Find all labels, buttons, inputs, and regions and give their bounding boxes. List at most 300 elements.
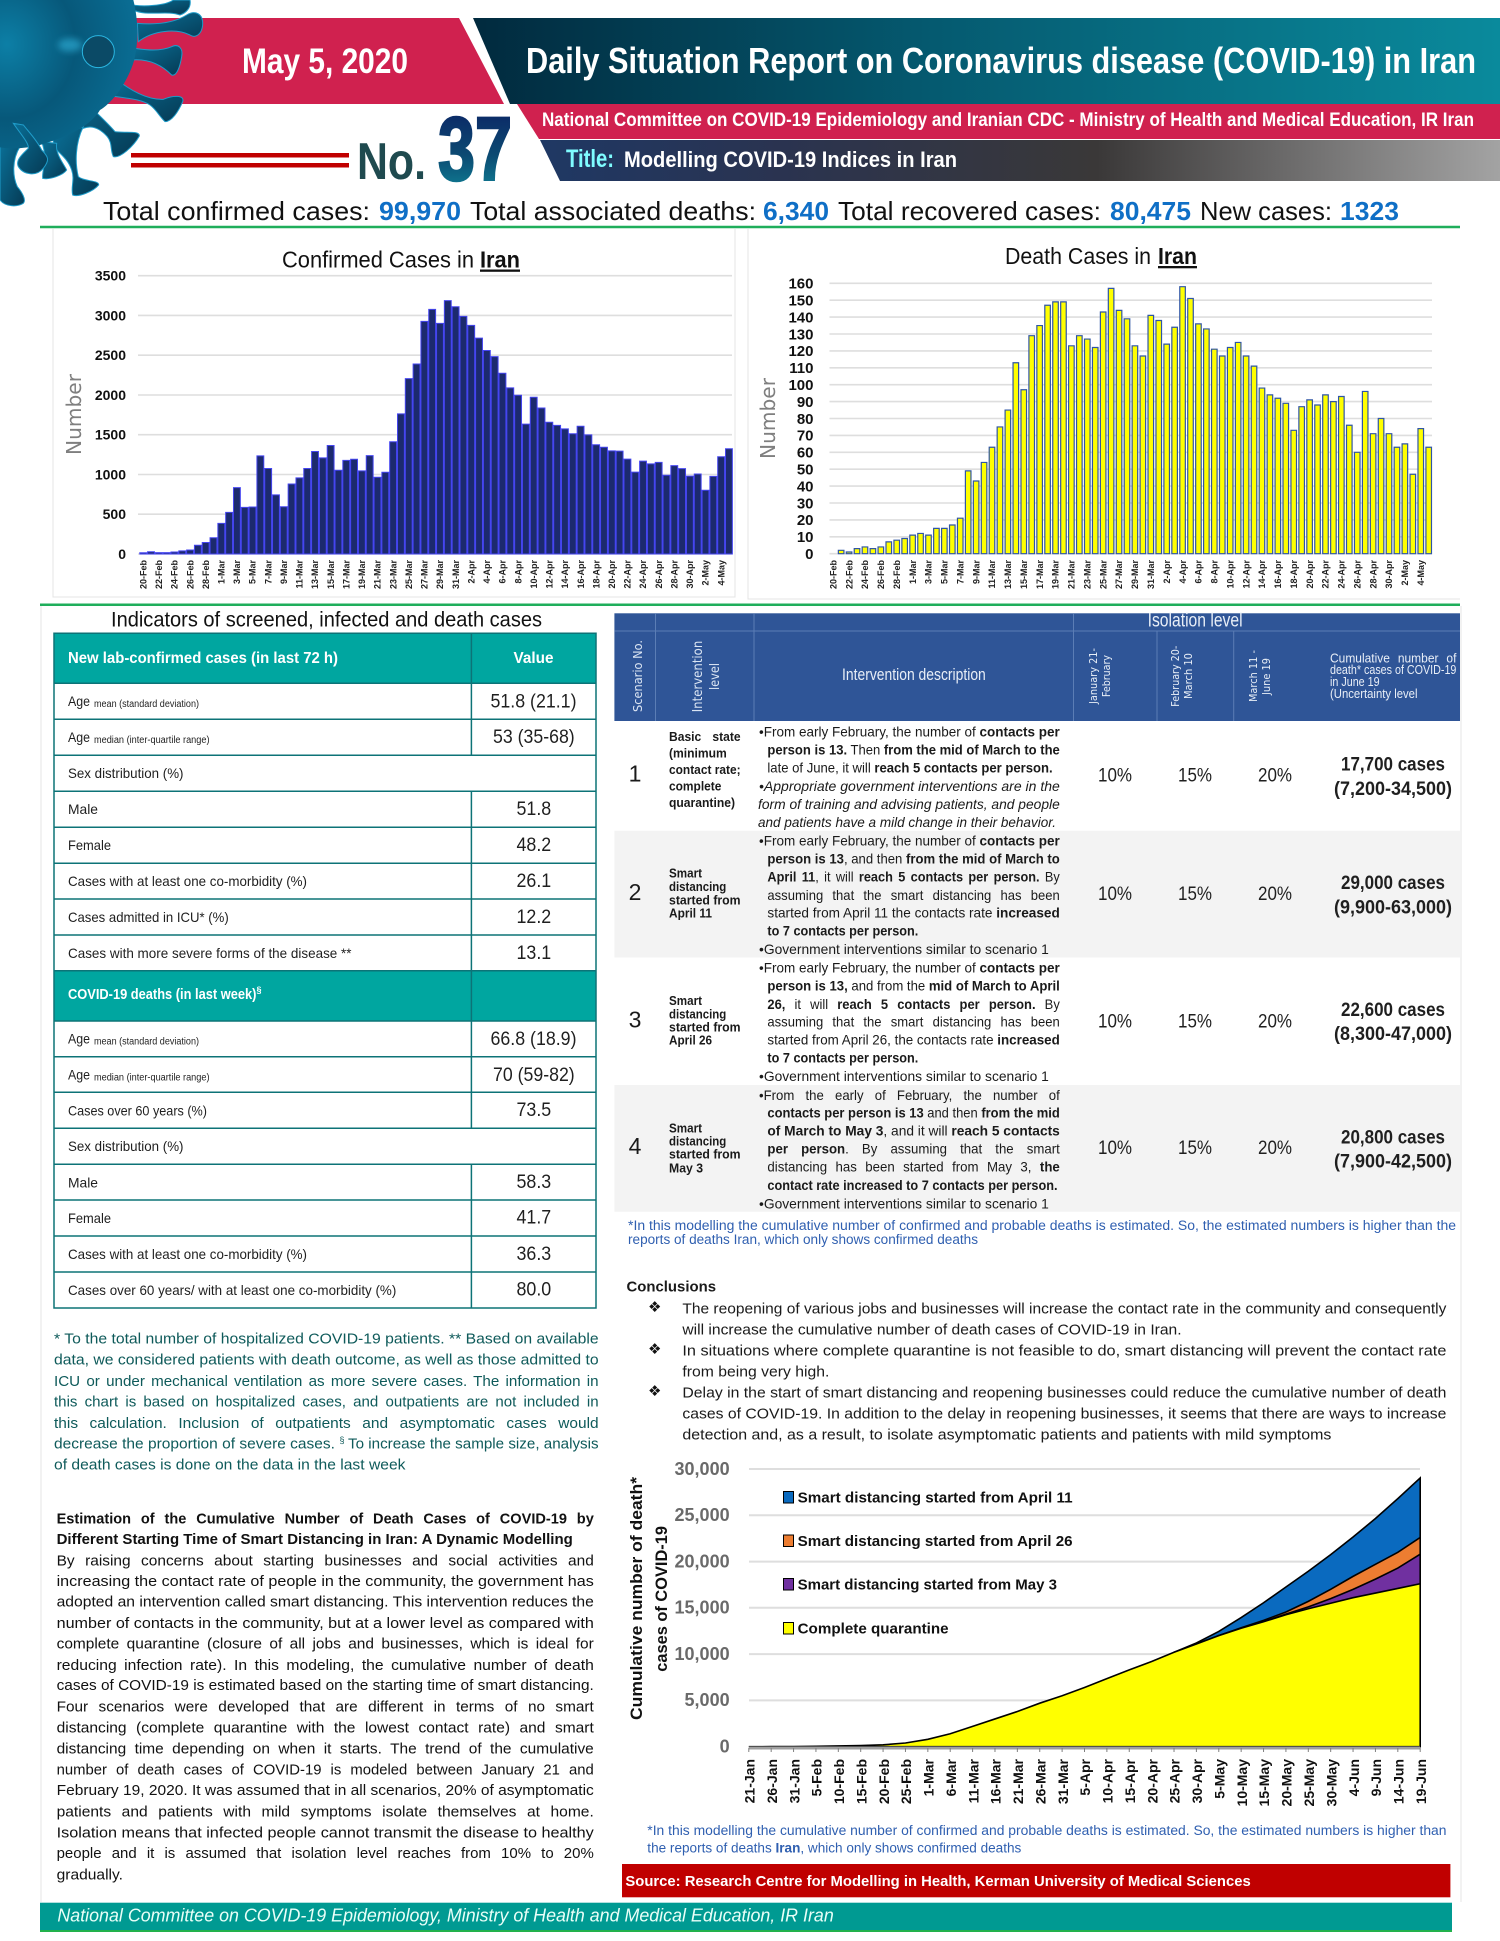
icon: coronavirus [0,0,203,206]
scenario 1: and patients have a mild change in their behavior. [758,814,1056,830]
row: male [68,799,551,820]
headline totals: Total associated deaths: [470,196,756,226]
scenario 4: started from [669,1148,741,1162]
row: co-morbidity: Cases with at least one co-morbidity (%) [68,873,307,889]
table header: Cumulative number of [1330,650,1457,665]
conclusion 3 [648,1382,1446,1443]
row: over 60 with co-morbidity [68,1280,551,1300]
issue number [131,100,512,200]
conclusion 3: cases of COVID-19. In addition to the delay in reopening businesses, it seems that there are ways to increase [682,1405,1446,1422]
chart: confirmed cases [62,246,732,589]
row: deaths sex distribution: Sex distribution (%) [68,1138,184,1154]
study body: number of contacts in the community, but at a lower level as compared with [57,1615,594,1632]
x axis date labels: 11-Mar [987,560,997,589]
scenario 3: started from April 26, the contacts rate increased [767,1032,1060,1048]
row: more severe: Cases with more severe forms of the disease ** [68,945,352,961]
x axis date labels: 15-Mar [326,560,336,589]
x axis date labels: 21-Mar [1067,560,1077,589]
x axis date labels: 16-Apr [1273,560,1283,589]
scenario 2: 10% [1098,884,1132,905]
header: COVID-19 deaths: § [256,985,262,995]
row: deaths age median [68,1065,575,1086]
area: smart distancing from May 3 [1219,1554,1420,1747]
x axis date labels: 2-Apr [466,560,476,584]
y axis labels: 15,000 [675,1598,730,1618]
study body: complete quarantine (closure of all jobs and businesses, which is ideal for [57,1635,594,1652]
x axis date labels: 7-Mar [955,560,965,584]
table header: Intervention description [842,665,986,684]
scenario 1: Basic state [669,730,741,744]
row: age mean: 51.8 (21.1) [490,692,576,712]
footer bar: National Committee on COVID-19 Epidemiology, Ministry of Health and Medical Education, IR Iran [57,1906,834,1926]
study body: increasing the contact rate of people in the community, the government has [57,1573,594,1590]
bars: daily deaths [838,287,1431,554]
scenario 3: •From early February, the number of contacts per [759,960,1060,976]
y axis labels: 3000 [95,307,126,323]
footnote: table notes: data, we considered patients with death outcome, as well as those admitted to [54,1352,599,1369]
scenario 3 [629,960,1452,1084]
study heading: Different Starting Time of Smart Distancing in Iran: A Dynamic Modelling [57,1531,573,1548]
row: deaths male: Male [68,1174,98,1190]
x axis date labels: 27-Mar [1114,560,1124,589]
x axis date labels: 10-Apr [529,560,539,589]
x axis date labels: 20-Feb [138,560,148,589]
issue number: No. [357,133,426,191]
y axis labels: 90 [797,394,814,411]
row: age median [68,727,575,748]
x axis date labels: 28-Feb [201,560,211,589]
scenario 4: Smart [669,1121,703,1135]
legend: Smart distancing started from April 11 [798,1490,1073,1506]
area: complete quarantine [749,1584,1420,1747]
conclusions [626,1279,1447,1443]
y axis labels: 140 [788,309,814,326]
x axis date labels: 5-May [1211,1759,1227,1799]
table: indicators [54,633,596,1308]
x axis date labels: 15-Feb [853,1759,869,1804]
x axis date labels: 4-Apr [1178,560,1188,584]
conclusion 2: from being very high. [682,1364,829,1381]
footnote: table notes [54,1330,599,1473]
row: female [68,835,551,856]
x axis date labels: 26-Jan [764,1759,780,1803]
y axis labels: 0 [720,1736,730,1756]
y axis title [627,1477,671,1720]
scenario 1: •From early February, the number of contacts per [759,724,1060,740]
scenario 4: distancing [669,1135,726,1149]
scenario 3: distancing [669,1007,726,1021]
row: ICU [68,907,551,928]
source bar: Source: Research Centre for Modelling in Health, Kerman University of Medical Sciences [625,1873,1251,1890]
y axis title: Number [62,373,86,455]
scenario 4: contact rate increased to 7 contacts per person. [767,1177,1058,1193]
row: co-morbidity [68,871,551,892]
table header: death* cases of COVID-19 [1330,662,1456,677]
x axis date labels: 4-May [716,560,726,586]
x axis date labels: 3-Mar [232,560,242,584]
x axis date labels: 26-Apr [1352,560,1362,589]
x axis date labels: 6-Mar [943,1758,959,1796]
x axis date labels: 24-Apr [638,560,648,589]
row: more severe [68,943,551,964]
x axis date labels: 20-Feb [876,1759,892,1804]
area: smart distancing from April 11 [1174,1478,1420,1747]
x axis date labels: 30-Apr [1384,560,1394,589]
heading: indicators: Indicators of screened, infected and death cases [111,608,542,632]
x axis date labels: 5-Apr [1077,1758,1093,1796]
x axis date labels: 20-Apr [1305,560,1315,589]
y axis labels: 10 [797,529,814,546]
x axis date labels: 19-Jun [1413,1759,1429,1804]
x axis date labels: 22-Feb [154,560,164,589]
scenario 1: (minimum [669,747,727,761]
conclusion 1: The reopening of various jobs and businesses will increase the contact rate in the community and consequently [682,1300,1447,1317]
x axis date labels: 26-Apr [654,560,664,589]
chart title: Iran [1158,243,1197,269]
y axis labels: 2000 [95,387,126,403]
x axis date labels: 22-Apr [623,560,633,589]
table header: (Uncertainty level [1330,686,1418,701]
y axis labels: 25,000 [675,1505,730,1525]
conclusion 1: will increase the cumulative number of death cases of COVID-19 in Iran. [681,1321,1182,1338]
x axis date labels: 7-Mar [263,560,273,584]
x axis date labels: 5-Mar [940,560,950,584]
study body: people and it is assumed that isolation level reaches from 10% to 20% [57,1845,594,1862]
x axis date labels: 15-May [1256,1759,1272,1806]
study body: cases of COVID-19 is estimated based on the starting time of smart distancing. [57,1677,594,1694]
row: deaths female [68,1208,551,1228]
x axis date labels: 1-Mar [921,1758,937,1796]
conclusion 2 [648,1340,1446,1381]
study body: gradually. [57,1866,123,1883]
x axis date labels: 5-Mar [248,560,258,584]
row: deaths age median: median (inter-quartile range) [94,1072,210,1084]
scenario 4: 20,800 cases [1341,1127,1445,1148]
y axis title: cases of COVID-19 [652,1526,671,1672]
footnote: table notes: * To the total number of hospitalized COVID-19 patients. ** Based on available [54,1330,599,1347]
table header: Intervention [691,641,706,712]
row: deaths co-morbidity: 36.3 [516,1244,551,1265]
scenario 1: 17,700 cases [1341,755,1445,776]
y axis labels: 70 [797,428,814,445]
y axis labels: 10,000 [675,1644,730,1664]
table header: Scenario No. [631,640,645,712]
row: ICU: Cases admitted in ICU* (%) [68,909,229,925]
x axis date labels: 26-Mar [1032,1758,1048,1804]
row: age median: 53 (35-68) [493,727,575,748]
row: over 60: 73.5 [516,1100,551,1121]
study body: distancing time depending on when it starts. The trend of the cumulative [57,1740,594,1757]
row: age mean: Age [68,693,90,709]
scenario 3: to 7 contacts per person. [767,1050,918,1066]
legend: Complete quarantine [798,1620,949,1638]
x axis date labels: 10-Feb [831,1759,847,1804]
x axis date labels: 19-Mar [357,560,367,589]
row: deaths age mean: mean (standard deviation) [94,1036,199,1048]
row: deaths female: 41.7 [516,1208,551,1228]
conclusion 1 [648,1298,1447,1338]
footnote: table notes: of death cases is done on the data in the last week [54,1456,406,1473]
x axis date labels: 13-Mar [310,560,320,589]
x axis date labels: 25-Mar [1098,560,1108,589]
x axis date labels: 9-Jun [1368,1759,1384,1796]
scenario 1: (7,200-34,500) [1334,779,1452,800]
table header: in June 19 [1330,674,1380,689]
recovered total: 80,475 [1110,196,1191,226]
scenario 4: May 3 [669,1161,703,1175]
banner: report title [473,18,1500,104]
y axis labels: 3500 [95,268,126,284]
x axis date labels: 28-Apr [669,560,679,589]
x axis date labels: 11-Mar [965,1758,981,1803]
study body: distancing (complete quarantine with the lowest contact rate) and smart [57,1720,595,1737]
scenario 3: 22,600 cases [1341,1000,1445,1021]
x axis date labels: 25-Apr [1167,1758,1183,1803]
x axis date labels: 30-Apr [1189,1758,1205,1803]
scenario 3: 3 [629,1007,641,1033]
table header: Isolation level [1148,611,1243,632]
scenario 2 [629,833,1452,957]
scenario 4 [629,1087,1452,1211]
headline totals: Total recovered cases: [838,196,1101,226]
scenario 2: 29,000 cases [1341,873,1445,894]
header: new lab-confirmed cases [54,633,596,683]
x axis date labels: 15-Mar [1019,560,1029,589]
x axis date labels: 24-Apr [1337,560,1347,589]
study body: Isolation means that infected people cannot transmit the disease to healthy [57,1824,594,1841]
study body: February 19, 2020. It was assumed that in all scenarios, 20% of asymptomatic [57,1782,594,1799]
x axis date labels: 5-Feb [809,1759,825,1796]
conclusion 2: ❖ [648,1340,661,1358]
scenario 1: contact rate; [669,763,741,777]
headline totals [103,196,1399,226]
scenario 4: 15% [1178,1138,1212,1159]
x axis date labels: 16-Mar [988,1758,1004,1804]
x axis date labels: 10-May [1234,1759,1250,1806]
header: new lab-confirmed cases: New lab-confirmed cases (in last 72 h) [68,650,338,667]
scenario 3: April 26 [669,1034,712,1048]
x axis date labels: 14-Jun [1391,1759,1407,1804]
x axis date labels: 24-Feb [170,560,180,589]
x axis date labels: 24-Feb [860,560,870,589]
conclusions heading: Conclusions [626,1279,716,1296]
header: new lab-confirmed cases: Value [514,650,554,667]
study body: reducing infection rate). In this modeling, the cumulative number of death [57,1657,594,1674]
y axis labels: 60 [797,445,814,462]
x axis date labels: 29-Mar [435,560,445,589]
x axis date labels: 25-Mar [404,560,414,589]
x axis date labels: 25-Feb [898,1759,914,1804]
row: deaths co-morbidity [68,1244,551,1265]
row: over 60: Cases over 60 years (%) [68,1102,207,1118]
y axis labels: 130 [788,326,814,343]
date: May 5, 2020 [242,42,408,81]
stacked areas [749,1478,1420,1747]
scenario 2: started from [669,893,741,907]
scenario 3: 20% [1258,1012,1292,1033]
x axis date labels: 17-Mar [1035,560,1045,589]
chart: cumulative deaths area [627,1459,1429,1806]
study heading: Estimation of the Cumulative Number of Death Cases of COVID-19 by [57,1510,594,1527]
x axis date labels: 1-Mar [908,560,918,584]
y axis labels: 0 [118,546,126,562]
y axis labels: 100 [788,377,814,394]
row: male: Male [68,801,98,817]
study body: number of death cases of COVID-19 is modeled between January 21 and [57,1761,594,1778]
y axis title: Cumulative number of death* [627,1477,646,1720]
x axis date labels: 11-Mar [295,560,305,589]
footnote: table notes: this chart is based on hospitalized cases, and outpatients are not included in [54,1394,599,1411]
banner: modelling title [540,140,1500,181]
table header: January 21- [1087,648,1100,705]
scenario 1: quarantine) [669,796,735,810]
y axis labels: 50 [797,462,814,478]
x axis date labels: 31-Mar [451,560,461,589]
x axis date labels: 21-Jan [742,1759,758,1803]
x axis date labels: 21-Mar [1010,1758,1026,1804]
x axis date labels: 21-Mar [373,560,383,589]
table: scenarios [614,611,1460,1212]
y axis labels: 40 [797,478,814,495]
x axis date labels: 30-Apr [685,560,695,589]
x axis date labels: 19-Mar [1051,560,1061,589]
chart note: *In this modelling the cumulative number of confirmed and probable deaths is estimated. So, the estimated numbers is higher than [647,1823,1446,1838]
study body: patients and patients with mild symptoms isolate themselves at home. [57,1804,594,1821]
study body: By raising concerns about starting businesses and social activities and [57,1552,594,1569]
confirmed total: 99,970 [379,196,461,226]
area: smart distancing from April 26 [1196,1537,1420,1747]
row: deaths age mean: Age [68,1030,90,1046]
x axis date labels: 23-Mar [1082,560,1092,589]
new cases total: 1323 [1340,196,1399,226]
x axis date labels: 31-Mar [1055,1758,1071,1804]
row: ICU: 12.2 [516,907,551,928]
row: deaths male [68,1172,551,1193]
scenario 2: (9,900-63,000) [1334,897,1452,918]
scenario 3: Smart [669,994,703,1008]
scenario 2: 20% [1258,884,1292,905]
row: deaths age mean [68,1029,576,1050]
x axis date labels: 23-Mar [388,560,398,589]
study body: adopted an intervention called smart distancing. This intervention reduces the [57,1594,594,1611]
x axis date labels: 17-Mar [341,560,351,589]
y axis labels: 1000 [95,466,126,482]
scenario 3: 26, it will reach 5 contacts per person. By [767,996,1060,1012]
chart note [647,1823,1446,1856]
y axis labels: 20,000 [675,1551,730,1571]
issue number: 37 [438,100,512,200]
x axis date labels: 9-Mar [971,560,981,584]
scenario 1: 20% [1258,766,1292,787]
y axis labels: 30 [797,495,814,512]
y axis labels: 5,000 [685,1690,730,1710]
y axis labels: 150 [788,293,814,310]
x axis date labels: 20-Apr [1144,1758,1160,1803]
row: over 60 [68,1100,551,1121]
scenario 4: 20% [1258,1138,1292,1159]
scenario 4: (7,900-42,500) [1334,1151,1452,1172]
scenario 3: person is 13, and from the mid of March to April [767,978,1060,994]
x axis date labels: 18-Apr [591,560,601,589]
table header: level [708,663,723,690]
table header: March 11 - [1247,650,1260,702]
x axis date labels: 4-Apr [482,560,492,584]
row: deaths male: 58.3 [516,1172,551,1193]
footnote: table notes: decrease the proportion of severe cases. [54,1436,335,1453]
row: sex distribution: Sex distribution (%) [68,765,184,781]
x axis date labels: 26-Feb [876,560,886,589]
scenario 1: 1 [629,761,641,787]
scenario 1: 10% [1098,766,1132,787]
conclusion 2: In situations where complete quarantine is not feasible to do, smart distancing will prevent the contact rate [682,1342,1446,1359]
x axis date labels: 12-Apr [545,560,555,589]
scenario 4: •From the early of February, the number of [759,1087,1060,1103]
y axis labels: 110 [789,360,814,377]
chart title: Confirmed Cases in [282,246,474,272]
title label: Title: [566,145,614,173]
conclusion 3: detection and, as a result, to isolate asymptomatic patients and patients with mild symptoms [682,1426,1331,1443]
study body: Four scenarios were developed that are different in terms of no smart [57,1699,595,1716]
y axis labels: 0 [805,546,814,563]
x axis date labels: 14-Apr [560,560,570,589]
x axis date labels: 29-Mar [1130,560,1140,589]
scenario 3: 15% [1178,1012,1212,1033]
x axis date labels: 26-Feb [185,560,195,589]
y axis labels: 30,000 [675,1459,730,1479]
y axis labels: 2500 [95,347,126,363]
source bar [622,1864,1450,1897]
row: deaths age median: Age [68,1066,90,1082]
bars: daily confirmed cases [140,301,732,554]
x axis date labels: 31-Mar [1146,560,1156,589]
scenario 4: of March to May 3, and it will reach 5 contacts [767,1123,1060,1139]
conclusion 1: ❖ [648,1298,661,1316]
row: over 60 with co-morbidity: Cases over 60 years/ with at least one co-morbidity (%) [68,1282,396,1298]
table note [628,1218,1456,1247]
x axis date labels: 16-Apr [576,560,586,589]
x axis date labels: 12-Apr [1241,560,1251,589]
row: female: 48.2 [516,835,551,856]
x axis date labels: 10-Apr [1225,560,1235,589]
scenario 4: contacts per person is 13 and then from the mid [767,1105,1060,1121]
x axis date labels: 15-Apr [1122,1758,1138,1803]
scenario 3: assuming that the smart distancing has been [767,1014,1060,1030]
study body [57,1552,595,1883]
footnote: table notes: ICU or under mechanical ventilation as more severe cases. The information in [54,1373,599,1390]
chart: death cases [756,243,1432,589]
table header [614,611,1460,721]
scenario 1: person is 13. Then from the mid of March to the [767,741,1060,757]
x axis date labels: 10-Apr [1100,1758,1116,1803]
scenario 2: April 11, it will reach 5 contacts per person. By [767,869,1060,885]
x axis date labels: 31-Jan [786,1759,802,1803]
scenario 1: late of June, it will reach 5 contacts per person. [767,760,1053,776]
row: male: 51.8 [516,799,551,820]
scenario 3: (8,300-47,000) [1334,1024,1452,1045]
x axis date labels: 14-Apr [1257,560,1267,589]
table header: February 20- [1169,646,1182,707]
x axis date labels: 6-Apr [1194,560,1204,584]
row: co-morbidity: 26.1 [516,871,551,892]
row: age mean: mean (standard deviation) [94,699,199,710]
footnote: table notes: To increase the sample size, analysis [348,1436,599,1453]
banner: committee line [517,104,1500,139]
headline totals: Total confirmed cases: [103,196,370,226]
row: deaths female: Female [68,1210,111,1226]
row: age median: median (inter-quartile range) [94,735,210,746]
scenario 2: assuming that the smart distancing has been [767,887,1060,903]
x axis date labels: 28-Apr [1368,560,1378,589]
